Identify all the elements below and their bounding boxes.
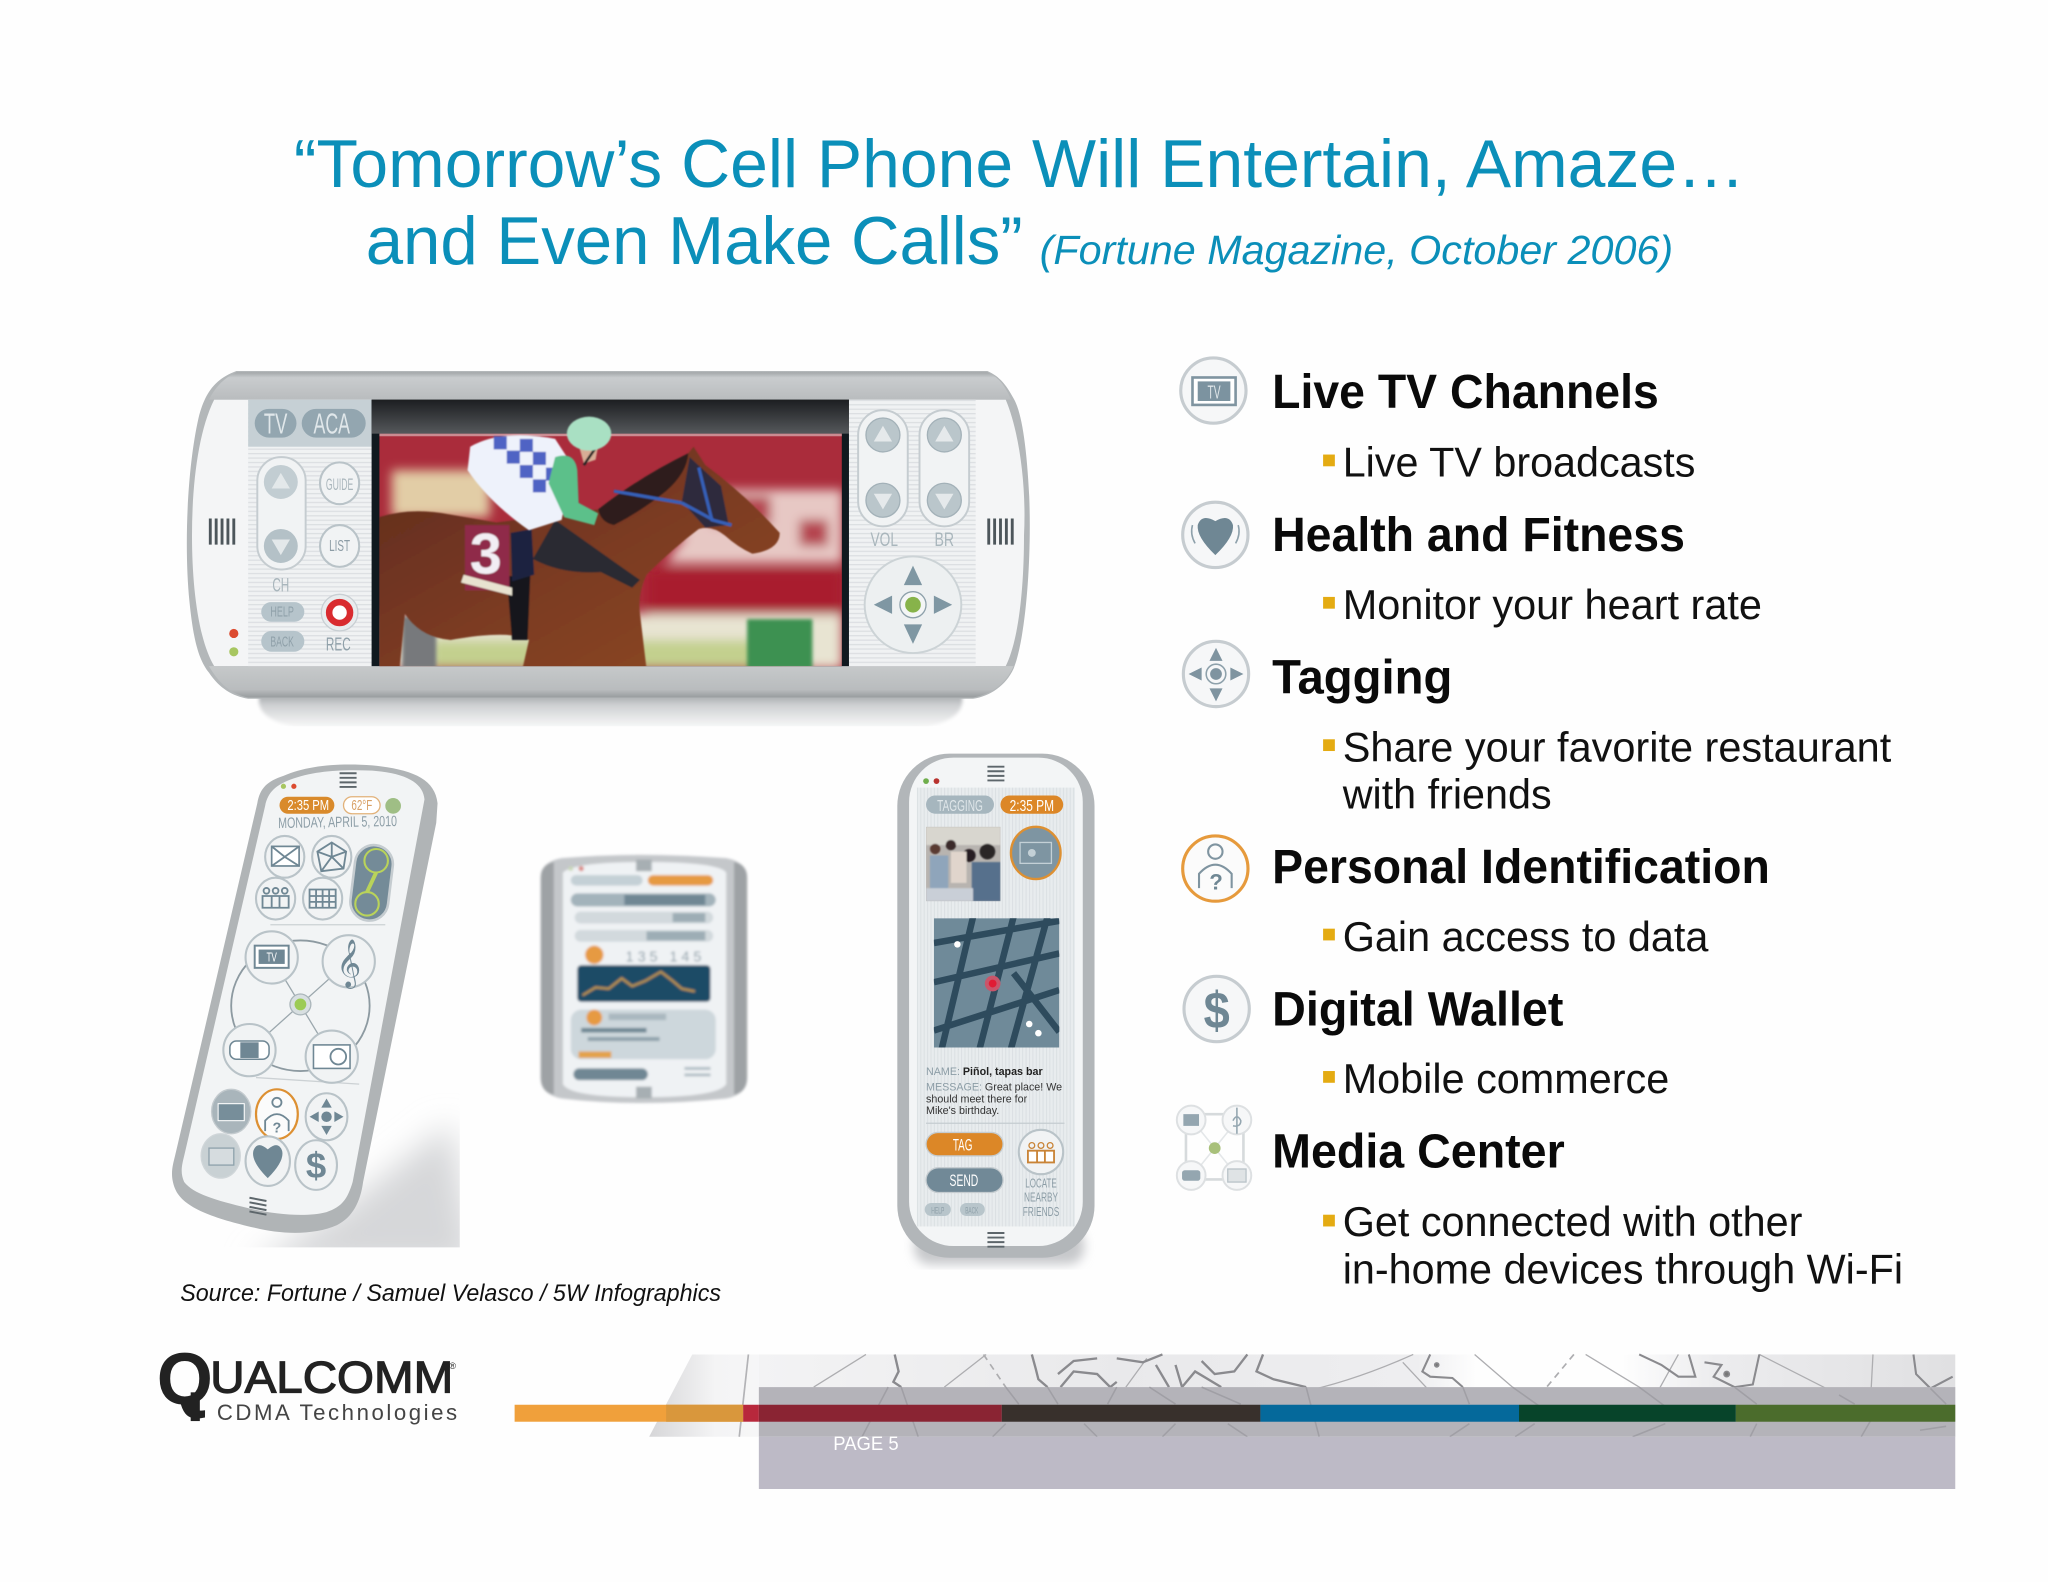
feature list (1177, 358, 1903, 1292)
item: Health and Fitness: Health and Fitness (1272, 508, 1685, 562)
icon: personal identification (1183, 836, 1248, 901)
tag message text (926, 1066, 1062, 1117)
item detail: Monitor your heart rate: Monitor your heart rate (1343, 581, 1762, 628)
tall tagging phone (897, 754, 1095, 1264)
phone app icons (256, 836, 395, 923)
tagging status pills: 2:35 PM (1010, 798, 1054, 815)
phone status bar: 62°F (351, 798, 372, 814)
jockey (468, 417, 611, 530)
phone status bar: MONDAY, APRIL 5, 2010 (278, 813, 397, 832)
title (294, 127, 1745, 279)
phone function icons: ? (273, 1120, 281, 1136)
left control panel: LIST (329, 538, 350, 555)
locate nearby friends: LOCATE (1025, 1175, 1057, 1190)
Qualcomm logo: CDMA Technologies (217, 1400, 457, 1425)
left control panel: TV (264, 409, 288, 441)
icon: dollar: $ (1204, 982, 1230, 1040)
tag and send buttons: HELP (931, 1205, 944, 1215)
source credit: Source: Fortune / Samuel Velasco / 5W Infographics (180, 1280, 721, 1307)
TV screen with horse race (372, 400, 849, 669)
item detail: Gain access to data: Gain access to data (1343, 913, 1709, 960)
tag and send buttons: TAG (953, 1136, 972, 1155)
icon: TV: TV (1208, 381, 1221, 402)
item detail: Get connected with other in-home devices: in-home devices through Wi-Fi (1343, 1245, 1903, 1292)
phone status bar: 2:35 PM (287, 798, 329, 814)
item: Digital Wallet: Digital Wallet (1272, 982, 1563, 1036)
status LEDs (229, 629, 238, 656)
left control panel: REC (326, 633, 351, 654)
left control panel (248, 400, 372, 666)
left control panel: ACA (313, 409, 351, 441)
tagging status pills: TAGGING (937, 798, 983, 815)
small health phone (541, 855, 747, 1103)
media hub: 𝄞 (336, 938, 361, 989)
title: “Tomorrow’s Cell Phone Will Entertain, Amaze… (294, 127, 1745, 202)
item: Media Center: Media Center (1272, 1125, 1565, 1179)
locate nearby friends: NEARBY (1024, 1190, 1058, 1205)
icon: media center (1177, 1106, 1251, 1190)
phone function icons (201, 1089, 347, 1190)
tag and send buttons: SEND (950, 1171, 978, 1190)
tag message text: Mike's birthday. (926, 1105, 999, 1117)
speaker grilles (210, 519, 1012, 545)
item detail: Share your favorite restaurant: Share your favorite restaurant (1343, 723, 1892, 770)
right control panel: VOL (871, 530, 898, 551)
title: (Fortune Magazine, October 2006) (1040, 227, 1673, 273)
item: Personal Identification: Personal Identification (1272, 840, 1770, 894)
left control panel: CH (272, 576, 289, 597)
Qualcomm logo: Q (157, 1339, 213, 1420)
locate nearby friends (1019, 1130, 1063, 1219)
left control panel: GUIDE (326, 475, 353, 494)
item detail: Get connected with other in-home devices: Get connected with other (1343, 1198, 1803, 1245)
left control panel: HELP (270, 605, 294, 621)
racehorse (379, 447, 780, 669)
street map (934, 917, 1059, 1049)
item detail: Live TV broadcasts: Live TV broadcasts (1343, 439, 1695, 486)
item: Live TV Channels: Live TV Channels (1272, 365, 1659, 419)
phone status bar (278, 784, 401, 832)
small health phone: 135 145 (626, 949, 701, 965)
landscape TV device (187, 371, 1030, 729)
icon: directional pad (1183, 641, 1249, 707)
page number: PAGE 5 (833, 1434, 899, 1455)
item detail: Share your favorite restaurant (1323, 723, 1892, 818)
Qualcomm logo (157, 1339, 457, 1425)
media hub: TV (266, 949, 277, 964)
left handheld phone (172, 764, 477, 1267)
icon: heart (1183, 502, 1248, 568)
tag and send buttons (925, 1132, 1003, 1216)
media hub (223, 931, 375, 1083)
tag message text: MESSAGE: Great place! We (926, 1082, 1062, 1094)
left control panel: BACK (270, 635, 294, 651)
Qualcomm logo: UALCOMM (210, 1353, 453, 1402)
item: Tagging: Tagging (1272, 651, 1452, 705)
icon: TV (1181, 358, 1246, 423)
footer band (515, 1354, 1955, 1489)
phone function icons: $ (306, 1145, 326, 1186)
world map strip (649, 1354, 1955, 1437)
item detail: Mobile commerce: Mobile commerce (1343, 1055, 1669, 1102)
Qualcomm logo: ® (449, 1361, 456, 1371)
item detail: Get connected with other in-home devices (1323, 1198, 1903, 1292)
right control panel: BR (935, 530, 954, 551)
icon: personal identification: ? (1209, 869, 1223, 894)
tag and send buttons: BACK (965, 1205, 978, 1215)
right control panel (849, 400, 976, 666)
tag message text: should meet there for (926, 1093, 1028, 1105)
icon: dollar (1184, 976, 1249, 1042)
racehorse: 3 (470, 522, 502, 586)
locate nearby friends: FRIENDS (1023, 1204, 1059, 1219)
tag message text: NAME: Piñol, tapas bar (926, 1066, 1043, 1078)
item detail: Share your favorite restaurant: with friends (1342, 771, 1552, 818)
camera button (1011, 827, 1061, 879)
tagging status pills (926, 795, 1063, 815)
title: and Even Make Calls” (366, 204, 1023, 279)
colour bar (515, 1405, 1955, 1422)
party photo (926, 827, 1000, 901)
page panel (759, 1437, 1955, 1489)
